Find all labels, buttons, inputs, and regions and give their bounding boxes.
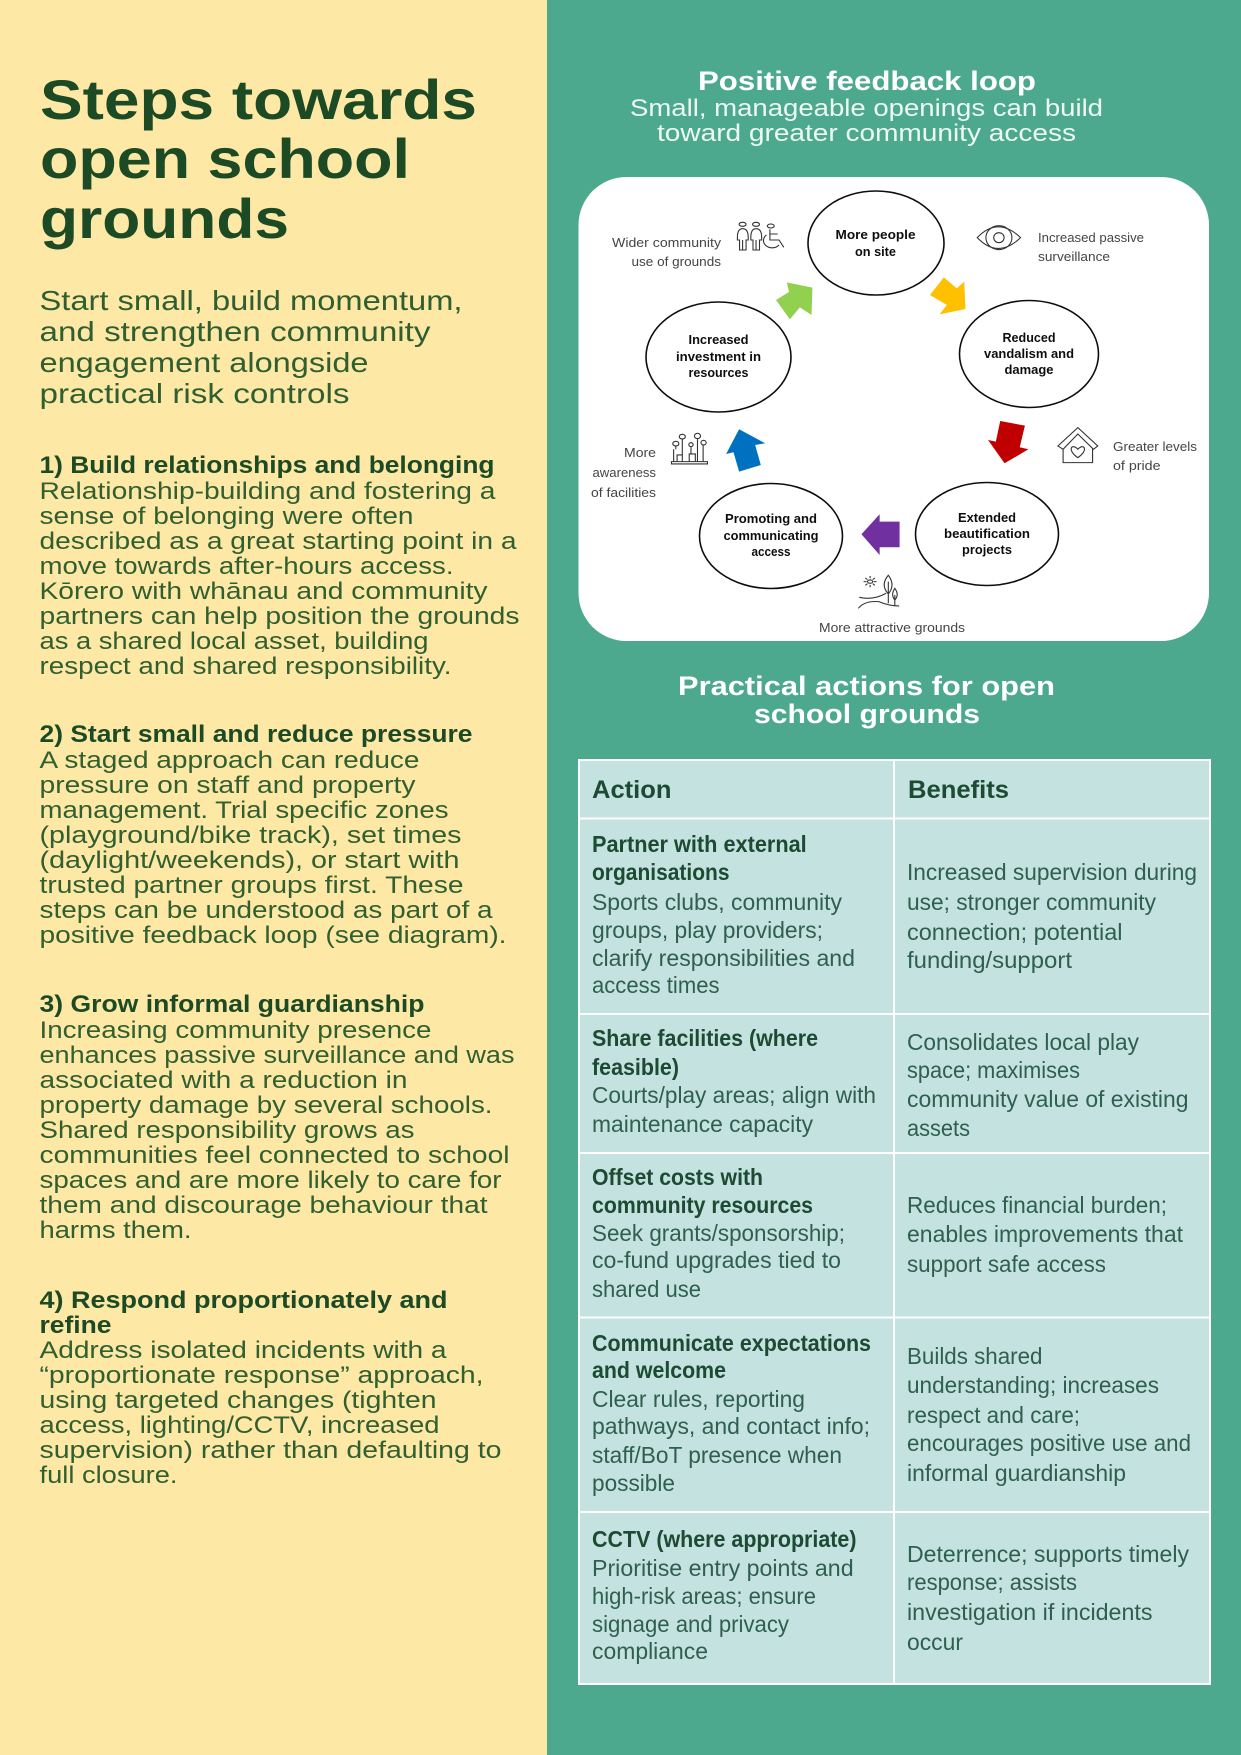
circle: more people on site bbox=[808, 191, 944, 295]
row: partner with external organisations: organisations bbox=[592, 859, 730, 885]
row: communicate expectations: and welcome bbox=[592, 1357, 726, 1383]
arrow: red bbox=[988, 421, 1028, 463]
row: partner with external organisations: access times bbox=[592, 972, 720, 998]
text block: step 1: Kōrero with whānau and community bbox=[40, 578, 488, 605]
row: CCTV: high-risk areas; ensure bbox=[592, 1583, 816, 1609]
row: CCTV: Prioritise entry points and bbox=[592, 1555, 854, 1581]
row: partner with external organisations: connection; potential bbox=[907, 919, 1122, 945]
circle: reduced vandalism bbox=[960, 300, 1098, 408]
row: partner with external organisations: use; stronger community bbox=[907, 889, 1156, 915]
text block: step 3: communities feel connected to school bbox=[40, 1142, 510, 1169]
label: increased passive surveillance: Increased passive bbox=[1038, 231, 1144, 245]
row: CCTV: response; assists bbox=[907, 1569, 1077, 1595]
row: share facilities: Courts/play areas; align with bbox=[592, 1082, 876, 1108]
label: more attractive grounds: More attractive grounds bbox=[819, 621, 965, 635]
row: CCTV: investigation if incidents bbox=[907, 1599, 1152, 1625]
row: offset costs: co-fund upgrades tied to bbox=[592, 1247, 841, 1273]
row: offset costs: Reduces financial burden; bbox=[907, 1192, 1167, 1218]
row: share facilities: space; maximises bbox=[907, 1057, 1080, 1083]
row: partner with external organisations: funding/support bbox=[907, 947, 1073, 973]
row: partner with external organisations: Partner with external bbox=[592, 831, 807, 857]
heading: positive feedback loop bbox=[630, 66, 1103, 147]
row: communicate expectations: encourages positive use and bbox=[907, 1430, 1191, 1456]
circle: extended beautification bbox=[916, 482, 1058, 586]
title bbox=[40, 68, 477, 250]
heading: positive feedback loop: Small, manageable openings can build bbox=[630, 95, 1103, 122]
label: greater levels of pride: Greater levels bbox=[1113, 440, 1197, 454]
text block: step 2: trusted partner groups first. These bbox=[40, 872, 464, 899]
heading: positive feedback loop: toward greater community access bbox=[657, 120, 1076, 147]
circle: promoting access: communicating bbox=[724, 529, 818, 543]
label: wider community use of grounds: Wider community bbox=[612, 236, 722, 250]
row: offset costs: Seek grants/sponsorship; bbox=[592, 1220, 845, 1246]
row: share facilities: Consolidates local play bbox=[907, 1029, 1139, 1055]
circle: promoting access bbox=[700, 484, 842, 588]
row: communicate expectations: respect and care; bbox=[907, 1402, 1080, 1428]
circle: promoting access: Promoting and bbox=[725, 512, 817, 526]
table header: Action bbox=[592, 776, 672, 804]
text block: step 2: pressure on staff and property bbox=[40, 772, 416, 799]
circle: reduced vandalism: Reduced bbox=[1002, 331, 1056, 345]
circle: increased investment bbox=[646, 302, 791, 412]
text block: step 4: “proportionate response” approach, bbox=[40, 1362, 484, 1389]
table: actions and benefits bbox=[579, 760, 1210, 1684]
text block: step 4 bbox=[40, 1287, 502, 1489]
table header: Benefits bbox=[908, 776, 1009, 804]
row: partner with external organisations: Sports clubs, community bbox=[592, 889, 842, 915]
row: offset costs: Offset costs with bbox=[592, 1164, 763, 1190]
panel: right column background bbox=[547, 0, 1241, 1755]
subtitle: practical risk controls bbox=[40, 378, 350, 409]
subtitle bbox=[40, 285, 463, 409]
row: partner with external organisations: clarify responsibilities and bbox=[592, 945, 855, 971]
row: communicate expectations: informal guardianship bbox=[907, 1460, 1126, 1486]
heading: positive feedback loop: Positive feedback loop bbox=[698, 66, 1036, 96]
text block: step 2: management. Trial specific zones bbox=[40, 797, 448, 824]
label: more awareness of facilities bbox=[591, 446, 656, 500]
label: more awareness of facilities: of facilities bbox=[591, 486, 656, 500]
arrow: yellow bbox=[930, 277, 966, 314]
text block: step 3: enhances passive surveillance and was bbox=[40, 1042, 514, 1069]
row: partner with external organisations bbox=[592, 831, 1197, 998]
text block: step 1: partners can help position the grounds bbox=[40, 603, 520, 630]
label: greater levels of pride: of pride bbox=[1113, 459, 1161, 473]
subtitle: engagement alongside bbox=[40, 347, 368, 378]
label: increased passive surveillance: surveillance bbox=[1038, 250, 1110, 264]
text block: step 4: access, lighting/CCTV, increased bbox=[40, 1412, 439, 1439]
circle: extended beautification: projects bbox=[962, 543, 1012, 557]
row: CCTV bbox=[592, 1526, 1189, 1664]
text block: step 2: A staged approach can reduce bbox=[40, 747, 420, 774]
text block: step 3: Shared responsibility grows as bbox=[40, 1117, 414, 1144]
icon: people and wheelchair bbox=[737, 222, 784, 250]
circle: more people on site: More people bbox=[836, 228, 916, 242]
heading: practical actions: Practical actions for open bbox=[678, 671, 1055, 701]
circle: increased investment: Increased bbox=[688, 333, 748, 347]
row: communicate expectations: Clear rules, reporting bbox=[592, 1386, 805, 1412]
heading: practical actions bbox=[678, 671, 1055, 729]
text block: step 2: 2) Start small and reduce pressure bbox=[40, 721, 472, 748]
text block: step 2: positive feedback loop (see diagram). bbox=[40, 922, 507, 949]
row: share facilities: Share facilities (where bbox=[592, 1025, 818, 1051]
text block: step 1: described as a great starting point in a bbox=[40, 528, 517, 555]
row: communicate expectations bbox=[592, 1330, 1191, 1496]
circle: reduced vandalism: damage bbox=[1004, 363, 1054, 377]
title: Steps towards bbox=[40, 68, 477, 131]
title: grounds bbox=[40, 187, 289, 250]
row: CCTV: CCTV (where appropriate) bbox=[592, 1526, 856, 1552]
row: offset costs bbox=[592, 1164, 1184, 1302]
subtitle: Start small, build momentum, bbox=[40, 285, 463, 316]
circle: extended beautification: beautification bbox=[944, 527, 1030, 541]
title: open school bbox=[40, 127, 410, 190]
row: partner with external organisations: Increased supervision during bbox=[907, 859, 1197, 885]
row: CCTV: occur bbox=[907, 1629, 963, 1655]
text block: step 3: harms them. bbox=[40, 1217, 192, 1244]
text block: step 2: steps can be understood as part of a bbox=[40, 897, 493, 924]
row: communicate expectations: pathways, and contact info; bbox=[592, 1413, 870, 1439]
row: communicate expectations: Communicate expectations bbox=[592, 1330, 871, 1356]
panel: feedback loop diagram bbox=[578, 177, 1209, 641]
text block: step 1: Relationship-building and fostering a bbox=[40, 478, 496, 505]
text block: step 4: using targeted changes (tighten bbox=[40, 1387, 436, 1414]
row: partner with external organisations: groups, play providers; bbox=[592, 917, 823, 943]
row: offset costs: community resources bbox=[592, 1192, 813, 1218]
circle: increased investment: resources bbox=[688, 366, 749, 380]
arrow: green bbox=[776, 282, 812, 319]
text block: step 1: 1) Build relationships and belonging bbox=[40, 452, 494, 479]
text block: step 2: (daylight/weekends), or start with bbox=[40, 847, 459, 874]
text block: step 4: 4) Respond proportionately and bbox=[40, 1287, 448, 1314]
text block: step 3 bbox=[40, 991, 514, 1244]
table header bbox=[592, 776, 1009, 804]
row: share facilities: feasible) bbox=[592, 1054, 679, 1080]
circle: more people on site: on site bbox=[855, 245, 896, 259]
text block: step 1: move towards after-hours access. bbox=[40, 553, 454, 580]
text block: step 2 bbox=[40, 721, 507, 949]
row: CCTV: compliance bbox=[592, 1638, 708, 1664]
row: offset costs: support safe access bbox=[907, 1251, 1106, 1277]
row: communicate expectations: staff/BoT presence when bbox=[592, 1442, 842, 1468]
icon: park facilities bbox=[671, 433, 707, 464]
text block: step 1: sense of belonging were often bbox=[40, 503, 414, 530]
text block: step 3: Increasing community presence bbox=[40, 1017, 432, 1044]
circle: increased investment: investment in bbox=[676, 350, 761, 364]
arrow: blue bbox=[726, 429, 765, 472]
text block: step 3: property damage by several schools. bbox=[40, 1092, 493, 1119]
row: CCTV: Deterrence; supports timely bbox=[907, 1541, 1189, 1567]
label: wider community use of grounds bbox=[612, 236, 722, 269]
subtitle: and strengthen community bbox=[40, 316, 430, 347]
panel: left column background bbox=[0, 0, 547, 1755]
row: offset costs: shared use bbox=[592, 1276, 701, 1302]
row: share facilities: maintenance capacity bbox=[592, 1111, 813, 1137]
row: share facilities bbox=[592, 1025, 1188, 1141]
text block: step 1: as a shared local asset, building bbox=[40, 628, 428, 655]
text block: step 1: respect and shared responsibility. bbox=[40, 653, 452, 680]
text block: step 1 bbox=[40, 452, 520, 680]
circle: extended beautification: Extended bbox=[958, 511, 1016, 525]
label: increased passive surveillance bbox=[1038, 231, 1144, 264]
text block: step 3: spaces and are more likely to care for bbox=[40, 1167, 502, 1194]
text block: step 3: them and discourage behaviour that bbox=[40, 1192, 488, 1219]
row: CCTV: signage and privacy bbox=[592, 1611, 789, 1637]
text block: step 3: 3) Grow informal guardianship bbox=[40, 991, 424, 1018]
label: wider community use of grounds: use of grounds bbox=[632, 255, 721, 269]
text block: step 2: (playground/bike track), set times bbox=[40, 822, 462, 849]
icon: house with heart bbox=[1058, 428, 1098, 463]
row: communicate expectations: understanding; increases bbox=[907, 1372, 1159, 1398]
row: offset costs: enables improvements that bbox=[907, 1221, 1184, 1247]
heading: practical actions: school grounds bbox=[754, 699, 980, 729]
text block: step 4: full closure. bbox=[40, 1462, 178, 1489]
text block: step 4: refine bbox=[40, 1312, 112, 1339]
text block: step 3: associated with a reduction in bbox=[40, 1067, 408, 1094]
row: communicate expectations: Builds shared bbox=[907, 1343, 1042, 1369]
text block: step 4: supervision) rather than defaulting to bbox=[40, 1437, 502, 1464]
text block: step 4: Address isolated incidents with a bbox=[40, 1337, 447, 1364]
row: share facilities: assets bbox=[907, 1115, 970, 1141]
row: share facilities: community value of existing bbox=[907, 1086, 1188, 1112]
label: more awareness of facilities: awareness bbox=[592, 466, 656, 480]
icon: attractive landscape bbox=[858, 575, 899, 608]
circle: reduced vandalism: vandalism and bbox=[984, 347, 1074, 361]
icon: eye bbox=[977, 226, 1021, 250]
label: greater levels of pride bbox=[1113, 440, 1197, 473]
row: communicate expectations: possible bbox=[592, 1470, 675, 1496]
arrow: purple bbox=[861, 514, 900, 555]
circle: promoting access: access bbox=[752, 545, 791, 559]
label: more awareness of facilities: More bbox=[624, 446, 656, 460]
